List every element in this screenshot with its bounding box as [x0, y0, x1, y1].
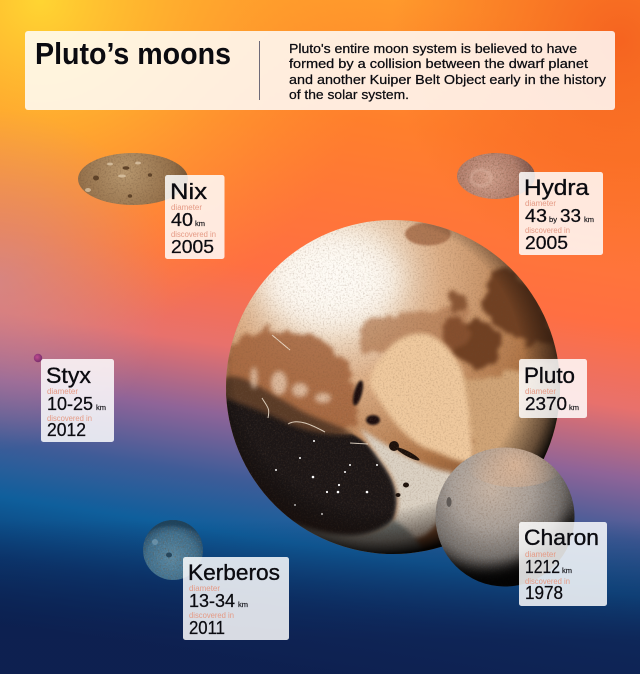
card: Kerberos: discovered in — [189, 611, 234, 620]
card: Hydra: km — [584, 215, 594, 224]
pale cloud spots — [250, 367, 331, 403]
card: Kerberos: diameter — [189, 584, 220, 593]
card: Styx: Styx — [46, 363, 92, 388]
card: Charon: km — [562, 566, 572, 575]
card: Charon: 1978 — [525, 583, 563, 603]
card: Charon: discovered in — [525, 577, 570, 586]
card: Nix: 40 — [171, 210, 193, 230]
card: Nix: diameter — [171, 203, 202, 212]
mottled left band — [224, 329, 357, 431]
card: Styx — [41, 359, 114, 442]
dark ridge spots — [351, 379, 421, 497]
intro text: formed by a collision between the dwarf planet — [289, 56, 588, 71]
card: Nix: km — [195, 219, 205, 228]
card: Charon: Charon — [524, 525, 599, 550]
card: Kerberos: 2011 — [189, 618, 225, 638]
card: Hydra: 33 — [560, 206, 581, 226]
card: Hydra: 2005 — [525, 233, 568, 253]
card: Hydra: by — [549, 215, 557, 224]
speckle texture — [227, 220, 546, 536]
card: Styx: km — [96, 403, 106, 412]
planet: Pluto — [222, 217, 563, 558]
moon: Kerberos — [143, 518, 203, 580]
card: Kerberos: Kerberos — [188, 560, 280, 585]
intro text — [289, 41, 606, 102]
header panel — [25, 31, 615, 110]
card: Pluto: diameter — [525, 387, 556, 396]
moon: Nix — [78, 153, 188, 205]
tan eastern plains — [464, 358, 558, 459]
card: Charon: diameter — [525, 550, 556, 559]
card: Hydra: diameter — [525, 199, 556, 208]
card: Styx: diameter — [47, 387, 78, 396]
card: Charon: 1212 — [525, 557, 560, 577]
cream southern swirl — [360, 428, 453, 540]
dark lower hemisphere — [222, 392, 397, 538]
card: Nix: discovered in — [171, 230, 216, 239]
moon: Styx — [34, 354, 42, 362]
card: Nix: 2005 — [171, 237, 214, 257]
dark eastern terrain — [442, 268, 555, 369]
card: Kerberos — [183, 557, 289, 640]
card: Kerberos: km — [238, 600, 248, 609]
card: Pluto: km — [569, 403, 579, 412]
card: Pluto: Pluto — [524, 363, 575, 388]
moon: Charon — [436, 448, 574, 586]
title: Pluto’s moons — [35, 36, 231, 71]
intro text: and another Kuiper Belt Object early in the history — [289, 72, 606, 87]
card: Pluto — [519, 359, 587, 418]
ridge lines — [262, 335, 368, 444]
card: Hydra: 43 — [525, 206, 547, 226]
card: Hydra — [519, 172, 603, 255]
card: Styx: discovered in — [47, 414, 92, 423]
heart plain — [370, 334, 474, 462]
card: Hydra: Hydra — [524, 175, 590, 200]
intro text: Pluto's entire moon system is believed to have — [289, 41, 577, 56]
card: Nix: Nix — [170, 179, 208, 204]
polar crater patch — [405, 222, 451, 246]
limb shadow — [223, 217, 563, 557]
card: Styx: 2012 — [47, 420, 86, 440]
bright lights — [275, 440, 378, 515]
card: Charon — [519, 522, 607, 606]
card: Nix — [165, 175, 224, 259]
card: Hydra: discovered in — [525, 226, 570, 235]
card: Styx: 10-25 — [47, 394, 93, 414]
card: Kerberos: 13-34 — [189, 591, 235, 611]
card: Pluto: 2370 — [525, 394, 567, 414]
moon: Hydra — [457, 153, 535, 199]
intro text: of the solar system. — [289, 87, 409, 102]
